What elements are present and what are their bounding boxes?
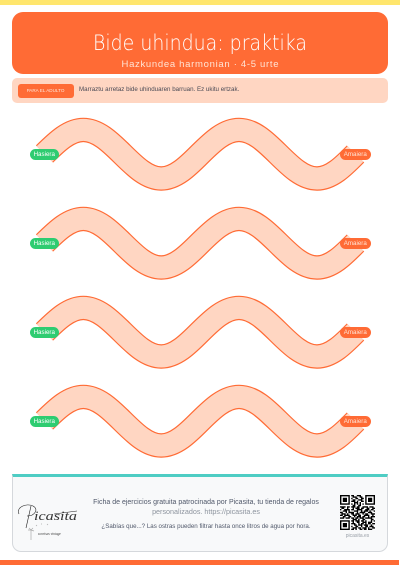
footer panel <box>12 474 388 552</box>
instruction panel <box>12 78 388 103</box>
end label 4: Amaiera <box>344 418 367 425</box>
logo: Picasita: icasita <box>34 508 78 523</box>
end label 2: Amaiera <box>344 240 367 247</box>
title: Bide uhindua: praktika <box>93 31 307 55</box>
bottom orange band <box>0 560 399 565</box>
end label 1 <box>340 149 370 160</box>
header panel <box>12 12 388 74</box>
QR code <box>340 495 375 530</box>
end label 3 <box>340 327 370 338</box>
start label 2 <box>30 238 58 249</box>
title: Hazkundea harmonian · 4-5 urte <box>122 59 278 70</box>
start label 1: Hasiera <box>34 151 55 158</box>
logo: Picasita <box>18 504 78 540</box>
start label 3: Hasiera <box>34 329 55 336</box>
top yellow band <box>0 0 400 5</box>
wave 4 <box>44 397 356 446</box>
sponsor text <box>93 498 319 516</box>
end label 1: Amaiera <box>344 151 367 158</box>
start label 3 <box>30 327 58 338</box>
fun fact text: ¿Sabías que...? Las ostras pueden filtrar hasta once litros de agua por hora. <box>101 523 311 530</box>
start label 1 <box>30 149 58 160</box>
wave 1 <box>44 130 356 178</box>
start label 4 <box>30 416 58 427</box>
end label 3: Amaiera <box>344 329 367 336</box>
end label 4 <box>340 416 370 427</box>
button: para el adulto <box>18 84 74 98</box>
instruction text: Marraztu arretaz bide uhinduaren barruan. Ez ukitu ertzak. <box>79 86 239 93</box>
button: para el adulto: PARA EL ADULTO <box>27 88 64 93</box>
title <box>93 31 307 70</box>
logo: Picasita: sonrisas vintage <box>38 531 61 536</box>
QR caption: picasita.es <box>346 533 369 539</box>
wave 2 <box>44 219 356 268</box>
wave 3 <box>44 308 356 356</box>
sponsor text: Ficha de ejercicios gratuita patrocinada por Picasita, tu tienda de regalos <box>93 499 319 506</box>
sponsor text: personalizados. https://picasita.es <box>152 507 260 516</box>
start label 2: Hasiera <box>34 240 55 247</box>
end label 2 <box>340 238 370 249</box>
start label 4: Hasiera <box>34 418 55 425</box>
